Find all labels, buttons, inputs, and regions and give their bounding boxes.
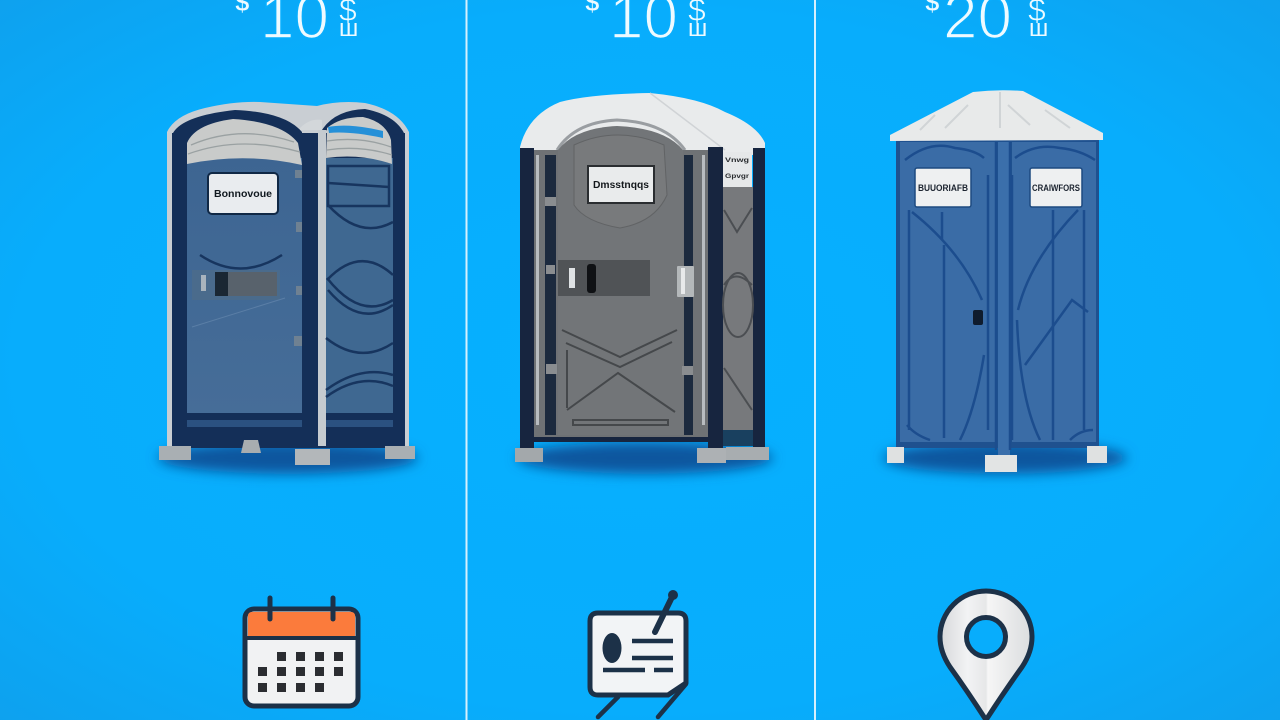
price: column 2: ш bbox=[688, 15, 707, 42]
portable toilet 3: blue with peaked white roof: BUUORIAFB bbox=[918, 183, 968, 193]
feet bbox=[515, 448, 543, 462]
portable toilet 1: blue with grey roof bbox=[158, 102, 418, 474]
column dividers bbox=[466, 0, 815, 720]
feet bbox=[887, 447, 904, 463]
price: column 1: ш bbox=[339, 15, 358, 42]
portable toilet 2: grey with white roof: Gpvgr bbox=[725, 174, 750, 180]
portable toilet 2: grey with white roof bbox=[515, 93, 773, 474]
portable toilet 1: blue with grey roof: Bonnovoue bbox=[214, 189, 272, 200]
price: column 2 bbox=[585, 0, 707, 52]
portable toilet 3: blue with peaked white roof: CRAIWFORS bbox=[1032, 183, 1080, 193]
portable toilet 3: blue with peaked white roof bbox=[883, 90, 1127, 474]
portable toilet 2: grey with white roof: Dmsstnqqs bbox=[593, 180, 649, 191]
price: column 1 bbox=[235, 0, 358, 52]
icon: location pin bbox=[940, 591, 1032, 720]
price: column 3: ш bbox=[1029, 15, 1048, 42]
icon: ID card with pen bbox=[590, 590, 686, 717]
feet bbox=[241, 440, 261, 453]
portable toilet 2: grey with white roof: Vnwg bbox=[725, 158, 750, 164]
icon: calendar bbox=[245, 598, 358, 706]
price: column 3 bbox=[925, 0, 1048, 52]
